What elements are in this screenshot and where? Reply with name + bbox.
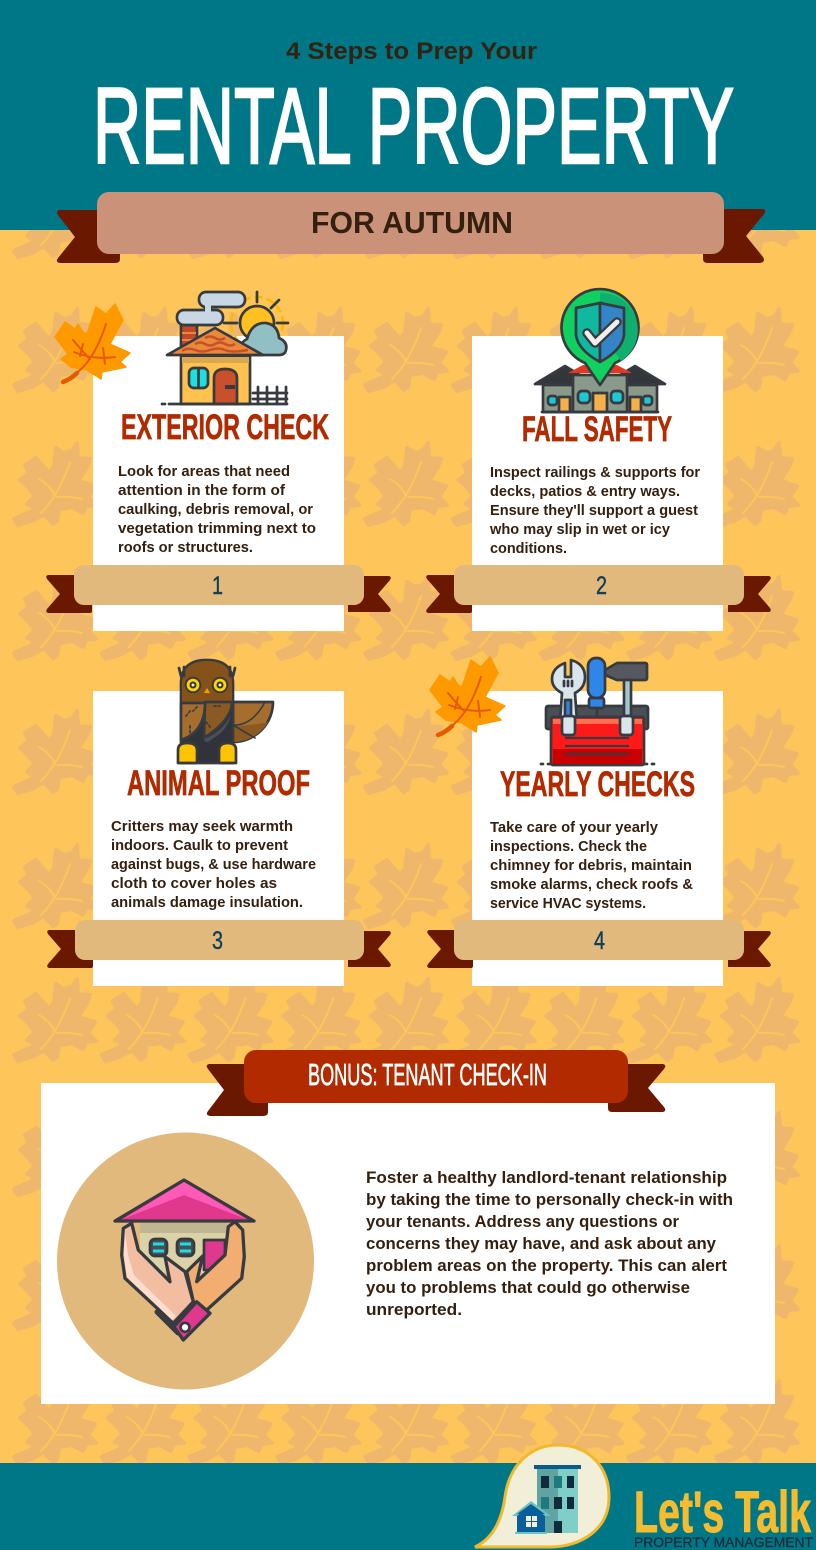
banner: bonus tenant check-in: BONUS: TENANT CHECK-IN (308, 1057, 547, 1092)
body text (366, 1169, 733, 1319)
body text (490, 820, 694, 912)
logo: let's talk property management (475, 1445, 813, 1550)
panel: bonus (41, 1050, 775, 1404)
body text: roofs or structures. (118, 540, 253, 556)
number ribbon 4 (427, 920, 771, 968)
body text (118, 464, 316, 556)
body text: indoors. Caulk to prevent (111, 838, 288, 854)
panel: fall safety (426, 289, 771, 631)
body text (111, 819, 316, 911)
heading: animal proof: ANIMAL PROOF (127, 764, 310, 803)
body text (489, 465, 700, 557)
icon: toolbox (541, 658, 654, 765)
number ribbon 3: 3 (212, 927, 223, 955)
body text: against bugs, & use hardware (111, 857, 316, 873)
background leaf pattern (12, 230, 802, 1463)
number ribbon 3 (47, 920, 391, 968)
heading: exterior check: EXTERIOR CHECK (121, 408, 329, 447)
number ribbon 1 (46, 565, 391, 613)
body text: who may slip in wet or icy (489, 522, 670, 538)
body text: Foster a healthy landlord-tenant relationship (366, 1169, 727, 1187)
body text: Inspect railings & supports for (490, 465, 700, 481)
heading: fall safety: FALL SAFETY (522, 410, 672, 449)
panel: exterior check (46, 292, 391, 631)
banner: bonus tenant check-in (207, 1050, 665, 1116)
banner: for autumn (57, 192, 765, 263)
body text: animals damage insulation. (111, 895, 303, 911)
body text: by taking the time to personally check-in with (366, 1191, 733, 1209)
heading: yearly checks: YEARLY CHECKS (500, 765, 695, 804)
icon: hands holding house (57, 1132, 314, 1390)
body text: conditions. (490, 541, 567, 557)
icon: maple leaf beside fourth card (430, 657, 505, 735)
body text: caulking, debris removal, or (118, 502, 313, 518)
subtitle: 4 Steps to Prep Your (286, 38, 537, 65)
logo: let's talk property management: PROPERTY MANAGEMENT (634, 1535, 813, 1550)
panel: animal proof (47, 660, 391, 986)
icon: house with sun and cloud (162, 292, 288, 404)
body text: cloth to cover holes as (111, 876, 277, 892)
body text: vegetation trimming next to (118, 521, 316, 537)
body text: your tenants. Address any questions or (366, 1213, 680, 1231)
body text: attention in the form of (118, 483, 285, 499)
number ribbon 2: 2 (596, 572, 607, 600)
footer band (0, 1463, 816, 1550)
body text: service HVAC systems. (490, 896, 646, 912)
number ribbon 1: 1 (212, 572, 223, 600)
body text: Ensure they'll support a guest (490, 503, 698, 519)
body text: you to problems that could go otherwise (366, 1279, 690, 1297)
banner: for autumn: FOR AUTUMN (311, 205, 513, 240)
icon: owl (178, 660, 273, 763)
body text: problem areas on the property. This can alert (366, 1257, 728, 1275)
body text: Look for areas that need (118, 464, 290, 480)
body text: unreported. (366, 1301, 462, 1319)
body text: chimney for debris, maintain (490, 858, 692, 874)
body text: Critters may seek warmth (111, 819, 293, 835)
body text: inspections. Check the (490, 839, 647, 855)
body text: Take care of your yearly (490, 820, 658, 836)
icon: maple leaf beside first card (55, 304, 130, 382)
body text: concerns they may have, and ask about any (366, 1235, 717, 1253)
body text: smoke alarms, check roofs & (490, 877, 694, 893)
body text: decks, patios & entry ways. (490, 484, 680, 500)
header band (0, 0, 816, 230)
icon: shield pin over houses (535, 289, 665, 412)
panel: yearly checks (427, 658, 771, 986)
number ribbon 4: 4 (594, 927, 605, 955)
number ribbon 2 (426, 565, 771, 613)
